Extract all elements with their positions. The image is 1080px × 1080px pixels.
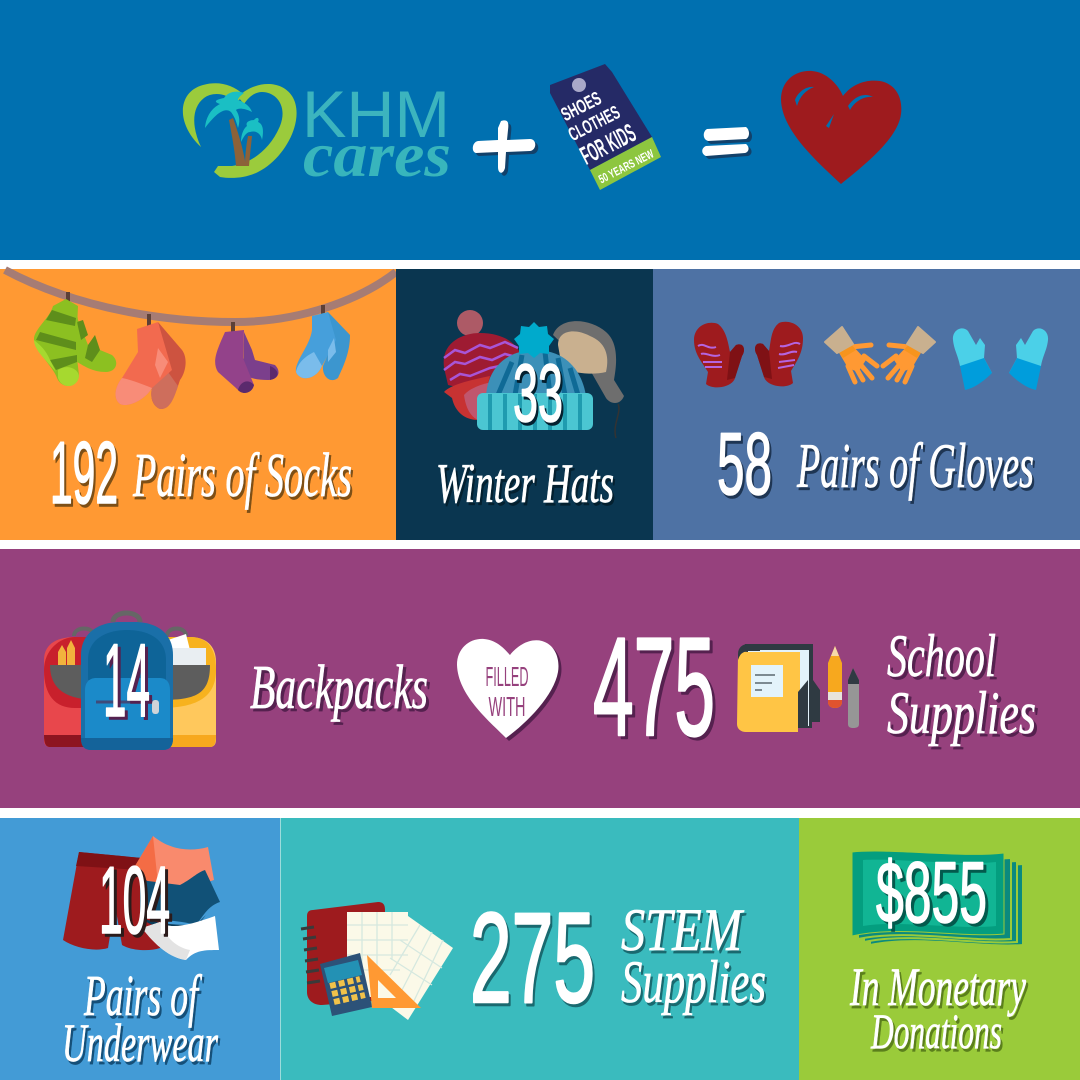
- icon: hats: [444, 310, 624, 438]
- icon: red heart: [781, 71, 901, 184]
- icon: shoes and clothes for kids tag: SHOES: [558, 88, 605, 126]
- label: pairs of underwear: Pairs of: [83, 963, 202, 1028]
- panel: stem supplies: [280, 818, 799, 1080]
- clothesline: [5, 270, 396, 322]
- logo: KHM cares: KHM: [302, 77, 450, 151]
- label: pairs of underwear: Underwear: [62, 1013, 219, 1073]
- icon: plus: [473, 120, 535, 173]
- icon: shoes and clothes for kids tag: 50 YEARS NEW: [596, 146, 656, 186]
- number: 275: 275: [470, 887, 595, 1030]
- icon: folder: [737, 644, 820, 732]
- label: backpacks: Backpacks: [250, 654, 428, 722]
- icon: blue socks: [296, 312, 350, 380]
- label: school supplies: [887, 623, 1036, 746]
- label: in monetary donations: [849, 957, 1026, 1059]
- label: school supplies: School: [887, 623, 996, 689]
- icon: green socks: [34, 299, 116, 386]
- number: 33: 33: [513, 348, 563, 439]
- label: 192 pairs of socks: [50, 423, 352, 522]
- label: stem supplies: Supplies: [621, 949, 766, 1015]
- icon: pencil: [828, 646, 842, 708]
- logo: KHM cares: cares: [303, 119, 451, 190]
- label: winter hats: Winter Hats: [436, 453, 614, 515]
- panel: backpacks and school supplies: 14: [103, 623, 150, 739]
- icon: money stack: [852, 851, 1023, 945]
- icon: purple socks: [215, 330, 279, 393]
- panel: underwear: [0, 818, 280, 1080]
- panel: socks: [0, 269, 396, 540]
- number: 475: 475: [593, 608, 715, 765]
- icon: backpacks: [44, 613, 216, 750]
- panel: underwear: 104: [99, 847, 170, 954]
- icon: equals: [702, 127, 749, 156]
- label: pairs of underwear: [62, 963, 219, 1073]
- panel: gloves: [653, 269, 1080, 540]
- panel: monetary donations: [799, 818, 1080, 1080]
- logo: KHM cares: [183, 77, 451, 190]
- label: 192 pairs of socks: 192: [50, 423, 118, 522]
- icon: shoes and clothes for kids tag: FOR KIDS: [575, 117, 641, 171]
- icon: filled with heart: FILLED: [486, 661, 528, 692]
- icon: red mittens: [694, 322, 803, 387]
- label: stem supplies: STEM: [621, 897, 744, 963]
- icon: blue mittens: [953, 328, 1048, 390]
- label: in monetary donations: Donations: [870, 1003, 1002, 1059]
- icon: notebook, paper, calculator, set square: [301, 902, 453, 1020]
- label: 192 pairs of socks: Pairs of Socks: [132, 442, 352, 510]
- number: $855: $855: [876, 845, 987, 941]
- panel: backpacks and school supplies: [0, 549, 1080, 808]
- icon: shoes and clothes for kids tag: CLOTHES: [565, 102, 624, 146]
- label: stem supplies: [621, 897, 766, 1015]
- icon: shoes and clothes for kids tag: [550, 64, 661, 190]
- icon: filled with heart: [457, 639, 558, 738]
- label: 58 pairs of gloves: [717, 414, 1034, 513]
- icon: red socks: [116, 322, 186, 409]
- label: 58 pairs of gloves: 58: [717, 414, 772, 513]
- icon: underwear: [63, 836, 220, 960]
- panel: header: [0, 0, 1080, 260]
- icon: filled with heart: WITH: [488, 691, 526, 722]
- icon: pen: [848, 668, 859, 728]
- icon: orange gloves: [825, 327, 935, 382]
- panel: winter hats: [396, 269, 653, 540]
